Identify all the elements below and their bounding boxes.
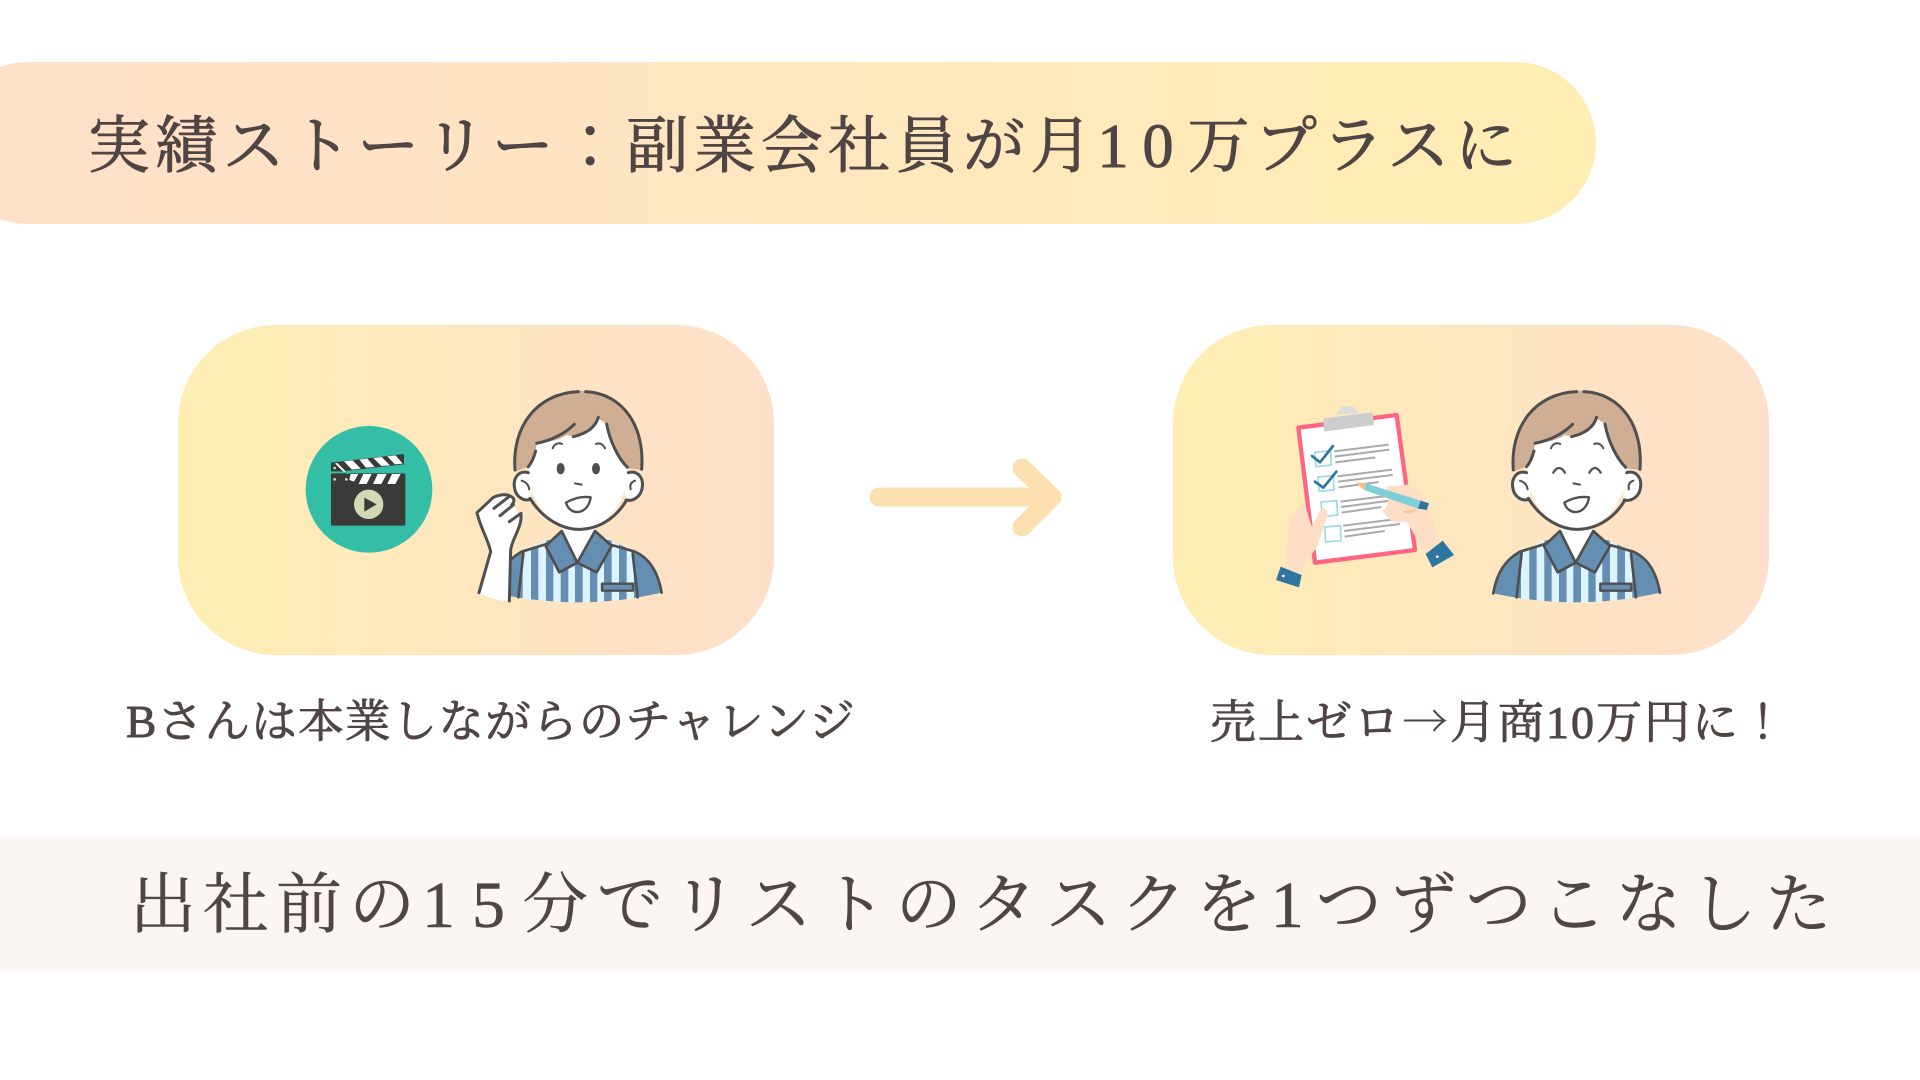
right cuff (1426, 541, 1454, 567)
title text: 実績ストーリー：副業会社員が月10万プラスに (88, 113, 1522, 181)
panel: after (1173, 325, 1769, 655)
left cuff (1276, 567, 1302, 587)
right hand (1383, 484, 1440, 553)
panel: before (178, 325, 774, 655)
arrow (879, 468, 1052, 527)
icon: film clapperboard (306, 426, 432, 553)
illustration: smiling man (1492, 391, 1662, 607)
caption: before: Bさんは本業しながらのチャレンジ (126, 696, 856, 747)
bottom band (0, 836, 1920, 971)
illustration: clipboard checklist with hands (1276, 407, 1454, 587)
caption: after: 売上ゼロ→月商10万円に！ (1210, 686, 1788, 752)
bottom text: 出社前の15分でリストのタスクを1つずつこなした (130, 869, 1841, 942)
left hand (1284, 505, 1327, 573)
title banner (0, 62, 1596, 224)
finger shadow (1402, 508, 1417, 514)
pencil (1356, 482, 1429, 510)
illustration: man with raised fist (477, 391, 663, 607)
